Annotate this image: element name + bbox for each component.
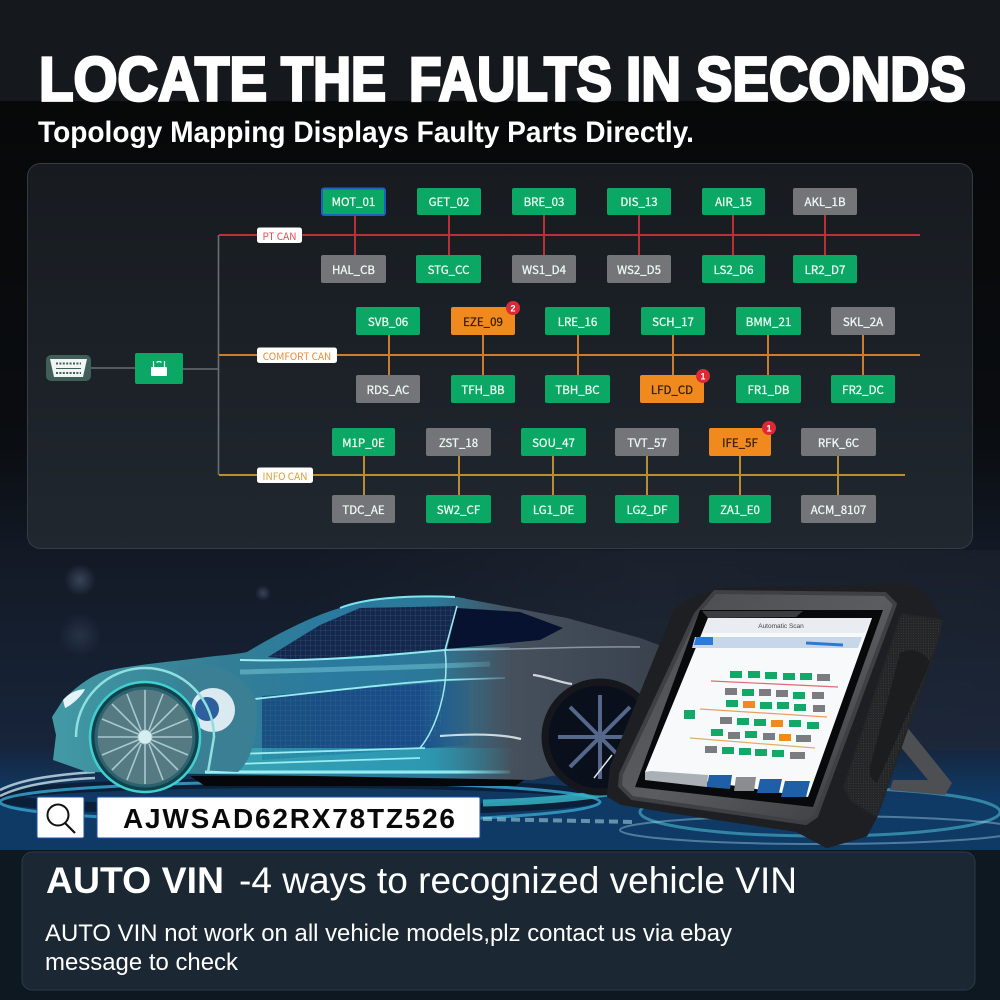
bus: COMFORT CAN	[219, 335, 920, 375]
kickstand	[890, 727, 952, 795]
car body	[52, 596, 700, 780]
modules: COMFORT CAN row: EZE_09	[463, 314, 503, 330]
headline: THE	[281, 46, 386, 114]
subheading: Topology Mapping Displays Faulty Parts Directly.	[38, 116, 694, 149]
bezel	[635, 610, 883, 807]
AUTO VIN note: message to check	[45, 949, 239, 976]
modules: COMFORT CAN row: FR2_DC	[842, 382, 884, 398]
modules: PT CAN row: WS1_D4	[522, 262, 567, 278]
modules: PT CAN row: DIS_13	[620, 194, 658, 210]
body highlights	[447, 647, 640, 650]
door panel	[262, 680, 470, 760]
modules: INFO CAN row: RFK_6C	[818, 435, 859, 451]
modules: PT CAN row: AIR_15	[715, 194, 752, 210]
tablet device	[610, 587, 952, 845]
modules: COMFORT CAN row: BMM_21	[746, 314, 791, 330]
modules: COMFORT CAN row: SKL_2A	[843, 314, 883, 330]
headline	[39, 46, 966, 114]
brake disc	[178, 665, 257, 772]
modules: COMFORT CAN row: TFH_BB	[461, 382, 505, 398]
modules: INFO CAN row: ZA1_E0	[720, 502, 760, 518]
car illustration	[52, 596, 700, 780]
modules: PT CAN row: BRE_03	[524, 194, 564, 210]
fault badges: 2	[510, 304, 516, 314]
speaker grip	[845, 615, 941, 815]
modules: INFO CAN row: LG1_DE	[533, 502, 574, 518]
headline: LOCATE	[39, 46, 267, 114]
modules: PT CAN row: STG_CC	[428, 262, 469, 278]
modules: INFO CAN row: LG2_DF	[627, 502, 668, 518]
modules: PT CAN row: LS2_D6	[714, 262, 753, 278]
icon: gateway	[135, 353, 183, 384]
modules: PT CAN row: HAL_CB	[332, 262, 375, 278]
modules: COMFORT CAN row: SVB_06	[368, 314, 408, 330]
modules: INFO CAN row: ZST_18	[439, 435, 478, 451]
modules: INFO CAN row: TVT_57	[627, 435, 667, 451]
bus: INFO CAN: INFO CAN	[263, 468, 307, 483]
modules: INFO CAN row: M1P_0E	[342, 435, 385, 451]
AUTO VIN note	[45, 920, 733, 976]
tablet body	[610, 587, 940, 845]
car rear wheel	[545, 682, 655, 792]
modules: INFO CAN row: IFE_5F	[722, 435, 758, 451]
modules: COMFORT CAN row: TBH_BC	[555, 382, 600, 398]
car shadow	[190, 776, 530, 786]
bus: INFO CAN	[219, 456, 905, 495]
modules: PT CAN row: MOT_01	[332, 194, 375, 210]
modules: INFO CAN row: SW2_CF	[437, 502, 481, 518]
modules: PT CAN row	[321, 188, 857, 283]
screen	[645, 618, 872, 797]
panel: AUTO VIN	[22, 852, 975, 990]
AUTO VIN heading: AUTO VIN	[46, 860, 224, 901]
modules: COMFORT CAN row: FR1_DB	[748, 382, 790, 398]
trunk lines	[90, 235, 218, 475]
ground rings	[0, 745, 1000, 853]
headline: FAULTS	[409, 46, 612, 114]
headline: SECONDS	[696, 46, 966, 114]
car front wheel	[90, 682, 200, 792]
modules: INFO CAN row: ACM_8107	[811, 502, 866, 518]
VIN box: AJWSAD62RX78TZ526	[123, 803, 455, 834]
headline: IN	[626, 46, 681, 114]
VIN box	[97, 797, 480, 838]
modules: PT CAN row: AKL_1B	[804, 194, 846, 210]
screen topology	[684, 671, 819, 757]
modules: COMFORT CAN row: RDS_AC	[367, 382, 409, 398]
screen title: Automatic Scan	[758, 623, 804, 630]
modules: INFO CAN row: TDC_AE	[342, 502, 385, 518]
AUTO VIN note: AUTO VIN not work on all vehicle models,plz contact us via ebay	[45, 920, 733, 947]
streaks	[205, 648, 510, 772]
screen bottom bar	[645, 771, 708, 787]
modules: COMFORT CAN row: LFD_CD	[651, 382, 693, 398]
bus: COMFORT CAN: COMFORT CAN	[263, 348, 331, 363]
modules: PT CAN row: LR2_D7	[805, 262, 845, 278]
modules: COMFORT CAN row: SCH_17	[652, 314, 694, 330]
modules: PT CAN row: GET_02	[429, 194, 469, 210]
modules: COMFORT CAN row: LRE_16	[558, 314, 597, 330]
modules: PT CAN row: WS2_D5	[617, 262, 661, 278]
sill glow	[205, 748, 515, 774]
rear quarter window	[447, 608, 563, 649]
bottom backdrop	[0, 850, 1000, 1000]
bus: PT CAN: PT CAN	[263, 228, 296, 243]
panel: topology map	[28, 164, 972, 548]
bus: PT CAN	[219, 215, 920, 255]
modules: INFO CAN row: SOU_47	[532, 435, 575, 451]
modules: COMFORT CAN row	[356, 307, 895, 403]
wheel arch	[76, 668, 214, 772]
tablet frame	[620, 592, 895, 823]
fault badges	[506, 301, 776, 435]
nose headlight	[63, 689, 85, 708]
fault badges: 1	[700, 372, 706, 382]
AUTO VIN subheading: -4 ways to recognized vehicle VIN	[239, 860, 797, 901]
icon: OBD connector	[46, 355, 91, 381]
side window	[268, 606, 457, 660]
search icon box	[37, 797, 84, 838]
modules: INFO CAN row	[332, 428, 876, 523]
fault badges: 1	[766, 424, 772, 434]
